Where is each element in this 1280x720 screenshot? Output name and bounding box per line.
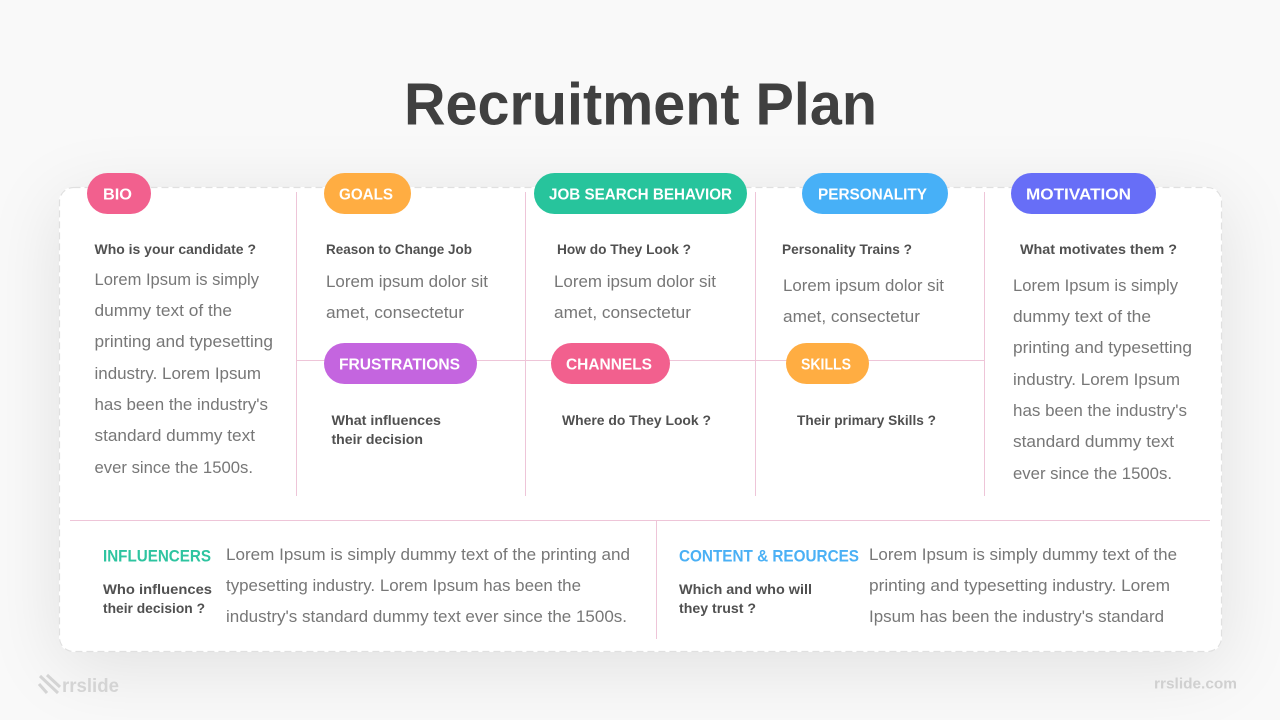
text block: bio description: printing and typesetting (94, 332, 273, 351)
panel: motivation (1011, 173, 1192, 483)
text block: bio description: dummy text of the (94, 301, 232, 320)
pill: motivation (1011, 173, 1156, 214)
text block: motivation description: standard dummy text (1013, 432, 1174, 451)
heading: what influences their decision: their decision (332, 431, 423, 447)
text block: job search description: amet, consectetur (554, 303, 691, 322)
heading: who is your candidate: Who is your candidate ? (94, 241, 256, 257)
text block: content description (869, 545, 1177, 626)
icon: rrslide mark (39, 675, 60, 693)
subheading: which and who will they trust: Which and who will (679, 581, 812, 597)
text block: motivation description: ever since the 1500s. (1013, 464, 1172, 483)
heading: how do they look: How do They Look ? (557, 241, 691, 257)
text block: influencers description: industry's standard dummy text ever since the 1500s. (226, 607, 627, 626)
text block: goals description: amet, consectetur (326, 303, 464, 322)
panel: bio (87, 173, 273, 477)
pill: goals (324, 173, 411, 214)
text block: personality description: Lorem ipsum dolor sit (783, 276, 944, 295)
text block: bio description (94, 270, 273, 477)
heading: reason to change job: Reason to Change Job (326, 241, 472, 257)
pill: personality (802, 173, 948, 214)
heading: what influences their decision: What influences (332, 412, 441, 428)
pill: bio (87, 173, 151, 214)
subheading: which and who will they trust (679, 581, 812, 616)
text block: goals description: Lorem ipsum dolor sit (326, 272, 488, 291)
heading: their primary skills: Their primary Skills ? (797, 412, 936, 428)
text block: motivation description: printing and typesetting (1013, 338, 1192, 357)
watermark: rrslide logo (39, 675, 119, 697)
subheading: who influences their decision (103, 581, 212, 616)
text block: influencers description: typesetting industry. Lorem Ipsum has been the (226, 576, 581, 595)
panel: content and resources (679, 545, 1177, 626)
panel: frustrations (324, 343, 477, 447)
subheading: which and who will they trust: they trust ? (679, 600, 756, 616)
pill: frustrations (324, 343, 477, 384)
watermark: rrslide url: rrslide.com (1154, 676, 1237, 692)
heading: personality trains: Personality Trains ? (782, 241, 912, 257)
title: Recruitment Plan (404, 72, 877, 138)
text block: bio description: industry. Lorem Ipsum (94, 364, 261, 383)
pill: motivation: MOTIVATION (1026, 186, 1131, 204)
panel: channels (551, 343, 711, 428)
text block: motivation description: Lorem Ipsum is simply (1013, 276, 1178, 295)
heading: content and resources: CONTENT & REOURCES (679, 548, 859, 566)
heading: what influences their decision (332, 412, 441, 447)
subheading: who influences their decision: their decision ? (103, 600, 205, 616)
pill: skills: SKILLS (801, 356, 851, 374)
pill: job search behavior (534, 173, 747, 214)
text block: content description: Ipsum has been the industry's standard (869, 607, 1164, 626)
panel: job search behavior (534, 173, 747, 322)
panel: dashed card outline (60, 188, 1222, 652)
text block: personality description: amet, consectetur (783, 307, 920, 326)
panel: goals (324, 173, 488, 322)
pill: channels (551, 343, 670, 384)
text block: bio description: has been the industry's (94, 395, 268, 414)
text block: bio description: standard dummy text (94, 426, 255, 445)
text block: content description: printing and typesetting industry. Lorem (869, 576, 1170, 595)
text block: motivation description: dummy text of the (1013, 307, 1151, 326)
heading: influencers: INFLUENCERS (103, 548, 211, 566)
subheading: who influences their decision: Who influences (103, 581, 212, 597)
pill: frustrations: FRUSTRATIONS (339, 356, 460, 374)
panel: personality (782, 173, 948, 326)
heading: what motivates them: What motivates them ? (1020, 241, 1177, 257)
text block: job search description: Lorem ipsum dolor sit (554, 272, 716, 291)
text block: motivation description (1013, 276, 1192, 483)
text block: motivation description: industry. Lorem Ipsum (1013, 370, 1180, 389)
text block: personality description (783, 276, 944, 326)
panel: skills (786, 343, 936, 428)
pill: job search behavior: JOB SEARCH BEHAVIOR (549, 186, 732, 204)
pill: goals: GOALS (339, 186, 393, 204)
text block: influencers description: Lorem Ipsum is simply dummy text of the printing and (226, 545, 630, 564)
pill: bio: BIO (103, 186, 132, 204)
pill: skills (786, 343, 869, 384)
text block: influencers description (226, 545, 630, 626)
text block: goals description (326, 272, 488, 322)
pill: personality: PERSONALITY (818, 186, 927, 204)
panel: influencers (103, 545, 630, 626)
pill: channels: CHANNELS (566, 356, 652, 374)
heading: where do they look: Where do They Look ? (562, 412, 711, 428)
text block: bio description: ever since the 1500s. (94, 458, 253, 477)
logo text: rrslide (62, 676, 119, 697)
text block: bio description: Lorem Ipsum is simply (94, 270, 259, 289)
panel: main card background (59, 187, 1222, 652)
text block: content description: Lorem Ipsum is simply dummy text of the (869, 545, 1177, 564)
text block: motivation description: has been the industry's (1013, 401, 1187, 420)
text block: job search description (554, 272, 716, 322)
